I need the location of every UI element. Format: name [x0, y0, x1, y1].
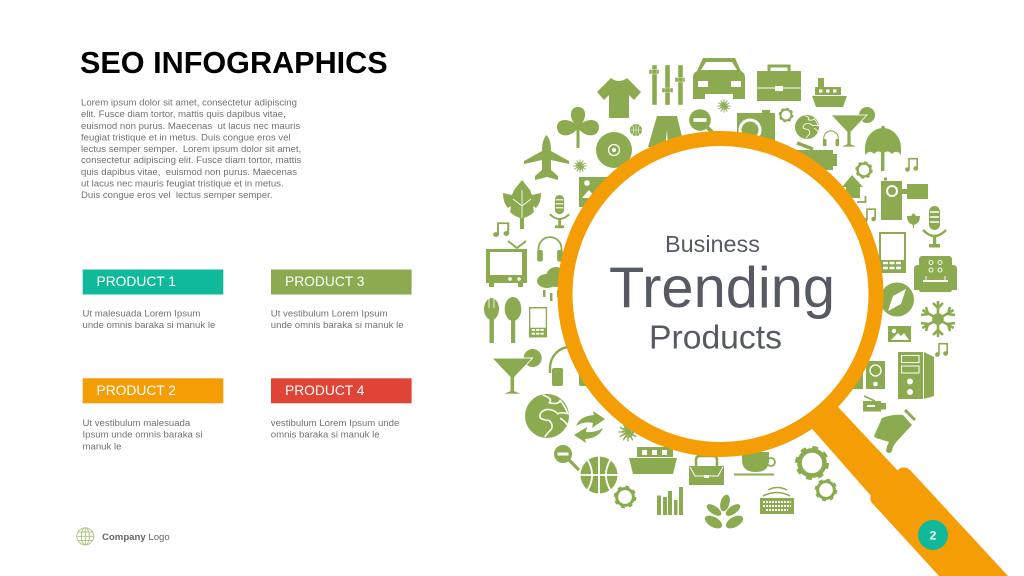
- icon: globe large: [525, 394, 569, 438]
- icon: computer tower: [898, 352, 934, 399]
- intro paragraph: Duis congue eros vel lectus semper semper.: [81, 190, 272, 201]
- icon: compass: [880, 282, 914, 316]
- icon: battery: [797, 143, 837, 170]
- icon: armchair: [914, 256, 957, 292]
- icon: globe small: [795, 115, 819, 139]
- panel: product 1: unde omnis baraka si manuk le: [82, 320, 215, 331]
- intro paragraph: quis dapibus vitae, euismod non purus. Maecenas: [81, 167, 297, 178]
- panel: product 2: PRODUCT 2: [96, 383, 176, 398]
- panel: product 2: [82, 378, 223, 452]
- magnifier neck: [785, 377, 900, 497]
- icon: microphone right: [923, 206, 946, 248]
- magnifier grip: [870, 467, 1008, 576]
- lens text: Business Trending Products: Trending: [609, 256, 835, 320]
- panel: product 3: Ut vestibulum Lorem Ipsum: [271, 308, 388, 319]
- icon: microphone left: [550, 195, 569, 228]
- icon: shorts: [648, 116, 684, 147]
- panel: product 4: vestibulum Lorem Ipsum unde: [271, 418, 399, 429]
- icon: airplane: [524, 135, 569, 180]
- icon: martini left: [492, 349, 542, 394]
- icon: small leaf: [907, 213, 920, 228]
- icon: coffee cup: [734, 452, 775, 476]
- icon: sliders: [649, 65, 685, 105]
- icon: music note 1: [905, 159, 918, 172]
- icon: television: [486, 241, 527, 287]
- icon: camcorder: [863, 396, 886, 412]
- icon: snowflake small bottom: [618, 422, 638, 442]
- panel: product 4: PRODUCT 4: [285, 383, 365, 398]
- panel: product 2: Ipsum unde omnis baraka si: [82, 430, 202, 441]
- icon: picture right: [888, 326, 911, 342]
- icon: clover: [557, 107, 599, 148]
- icon: rain cloud: [537, 267, 566, 301]
- panel: product 1: PRODUCT 1: [96, 274, 176, 289]
- icon: handbag: [689, 456, 724, 485]
- icon: snowflake small top: [574, 160, 586, 172]
- icon: phone right: [880, 233, 905, 273]
- icon: gear bottom: [615, 487, 635, 507]
- icon: basketball large: [580, 456, 618, 494]
- intro paragraph: consectetur adipiscing elit. Fusce diam tortor, mattis: [81, 155, 301, 166]
- company logo: [77, 528, 170, 545]
- intro paragraph: euismod non purus. Maecenas ut lacus nec mauris: [81, 121, 300, 132]
- panel: product 4: omnis baraka si manuk le: [271, 430, 380, 441]
- icon: snowflake tiny: [718, 100, 730, 112]
- icon: music note 2: [863, 209, 876, 222]
- title: SEO INFOGRAPHICS: [80, 46, 388, 80]
- panel: product 4: [271, 378, 412, 441]
- panel: product 2: manuk le: [82, 441, 121, 452]
- icon: house: [842, 175, 866, 202]
- icon: gear small: [779, 108, 793, 122]
- icon: video camera: [881, 178, 928, 220]
- lens text: Business Trending Products: Products: [649, 318, 782, 356]
- page number badge: 2: [930, 528, 937, 542]
- lens text: Business Trending Products: [609, 231, 835, 356]
- icon: headphones large: [550, 347, 590, 386]
- lens text: Business Trending Products: Business: [665, 231, 760, 257]
- icon: speakers: [850, 361, 885, 389]
- icon: car: [693, 58, 745, 99]
- icon: keyboard: [760, 488, 794, 514]
- icon: music note 3: [935, 344, 948, 357]
- icon: spoon: [505, 297, 521, 343]
- intro paragraph: Lorem ipsum dolor sit amet, consectetur adipiscing: [81, 98, 297, 108]
- magnifying glass: [565, 138, 1008, 576]
- icon: martini top right: [831, 107, 875, 147]
- intro paragraph: lectus semper semper. Lorem ipsum dolor sit amet,: [81, 144, 301, 155]
- panel: product 3: PRODUCT 3: [285, 274, 365, 289]
- icon: thumbs down: [874, 410, 915, 453]
- intro paragraph: [81, 98, 301, 201]
- icon: gears pair: [796, 447, 836, 500]
- company logo: Company Logo: [102, 532, 170, 543]
- icon: plant leaves: [703, 494, 745, 531]
- icon: t-shirt: [597, 78, 641, 118]
- intro paragraph: ut lacus nec mauris feugiat tristique et in metus.: [81, 178, 284, 189]
- magnifier lens: [565, 138, 876, 450]
- icon: phone left: [530, 308, 546, 337]
- icon: magnifier top: [689, 109, 719, 139]
- icon: snowflake: [921, 301, 955, 337]
- panel: product 2: Ut vestibulum malesuada: [82, 418, 191, 429]
- panel: product 1: [82, 270, 223, 331]
- icon: umbrella: [865, 126, 901, 171]
- panel: product 3: [271, 270, 412, 331]
- icon: magnifier bottom left: [554, 445, 579, 470]
- intro paragraph: feugiat tristique et in metus. Duis congue eros vel: [81, 132, 291, 143]
- panel: product 3: unde omnis baraka si manuk le: [271, 320, 404, 331]
- intro paragraph: elit. Fusce diam tortor, mattis quis dapibus vitae,: [81, 109, 286, 120]
- icon: briefcase: [757, 66, 801, 101]
- panel: product 1: Ut malesuada Lorem Ipsum: [82, 308, 200, 319]
- icon: vine leaf: [503, 180, 541, 229]
- icon: bar chart: [657, 487, 683, 515]
- icon: camera: [737, 110, 775, 147]
- icon: ship large: [629, 447, 677, 474]
- icon: gear medium: [856, 162, 872, 178]
- icon: compact disc: [596, 132, 632, 168]
- icon: ship small: [812, 78, 847, 107]
- icon: fork: [484, 298, 499, 343]
- icon: music note left: [493, 223, 509, 237]
- icon: headphones small: [823, 131, 839, 146]
- page number badge: [918, 520, 948, 550]
- icon: recycle arrows: [574, 411, 605, 443]
- icon: picture left: [579, 177, 615, 207]
- icon: headphones left: [537, 237, 563, 261]
- icon: basketball small: [630, 124, 642, 136]
- icon cloud: [484, 58, 957, 531]
